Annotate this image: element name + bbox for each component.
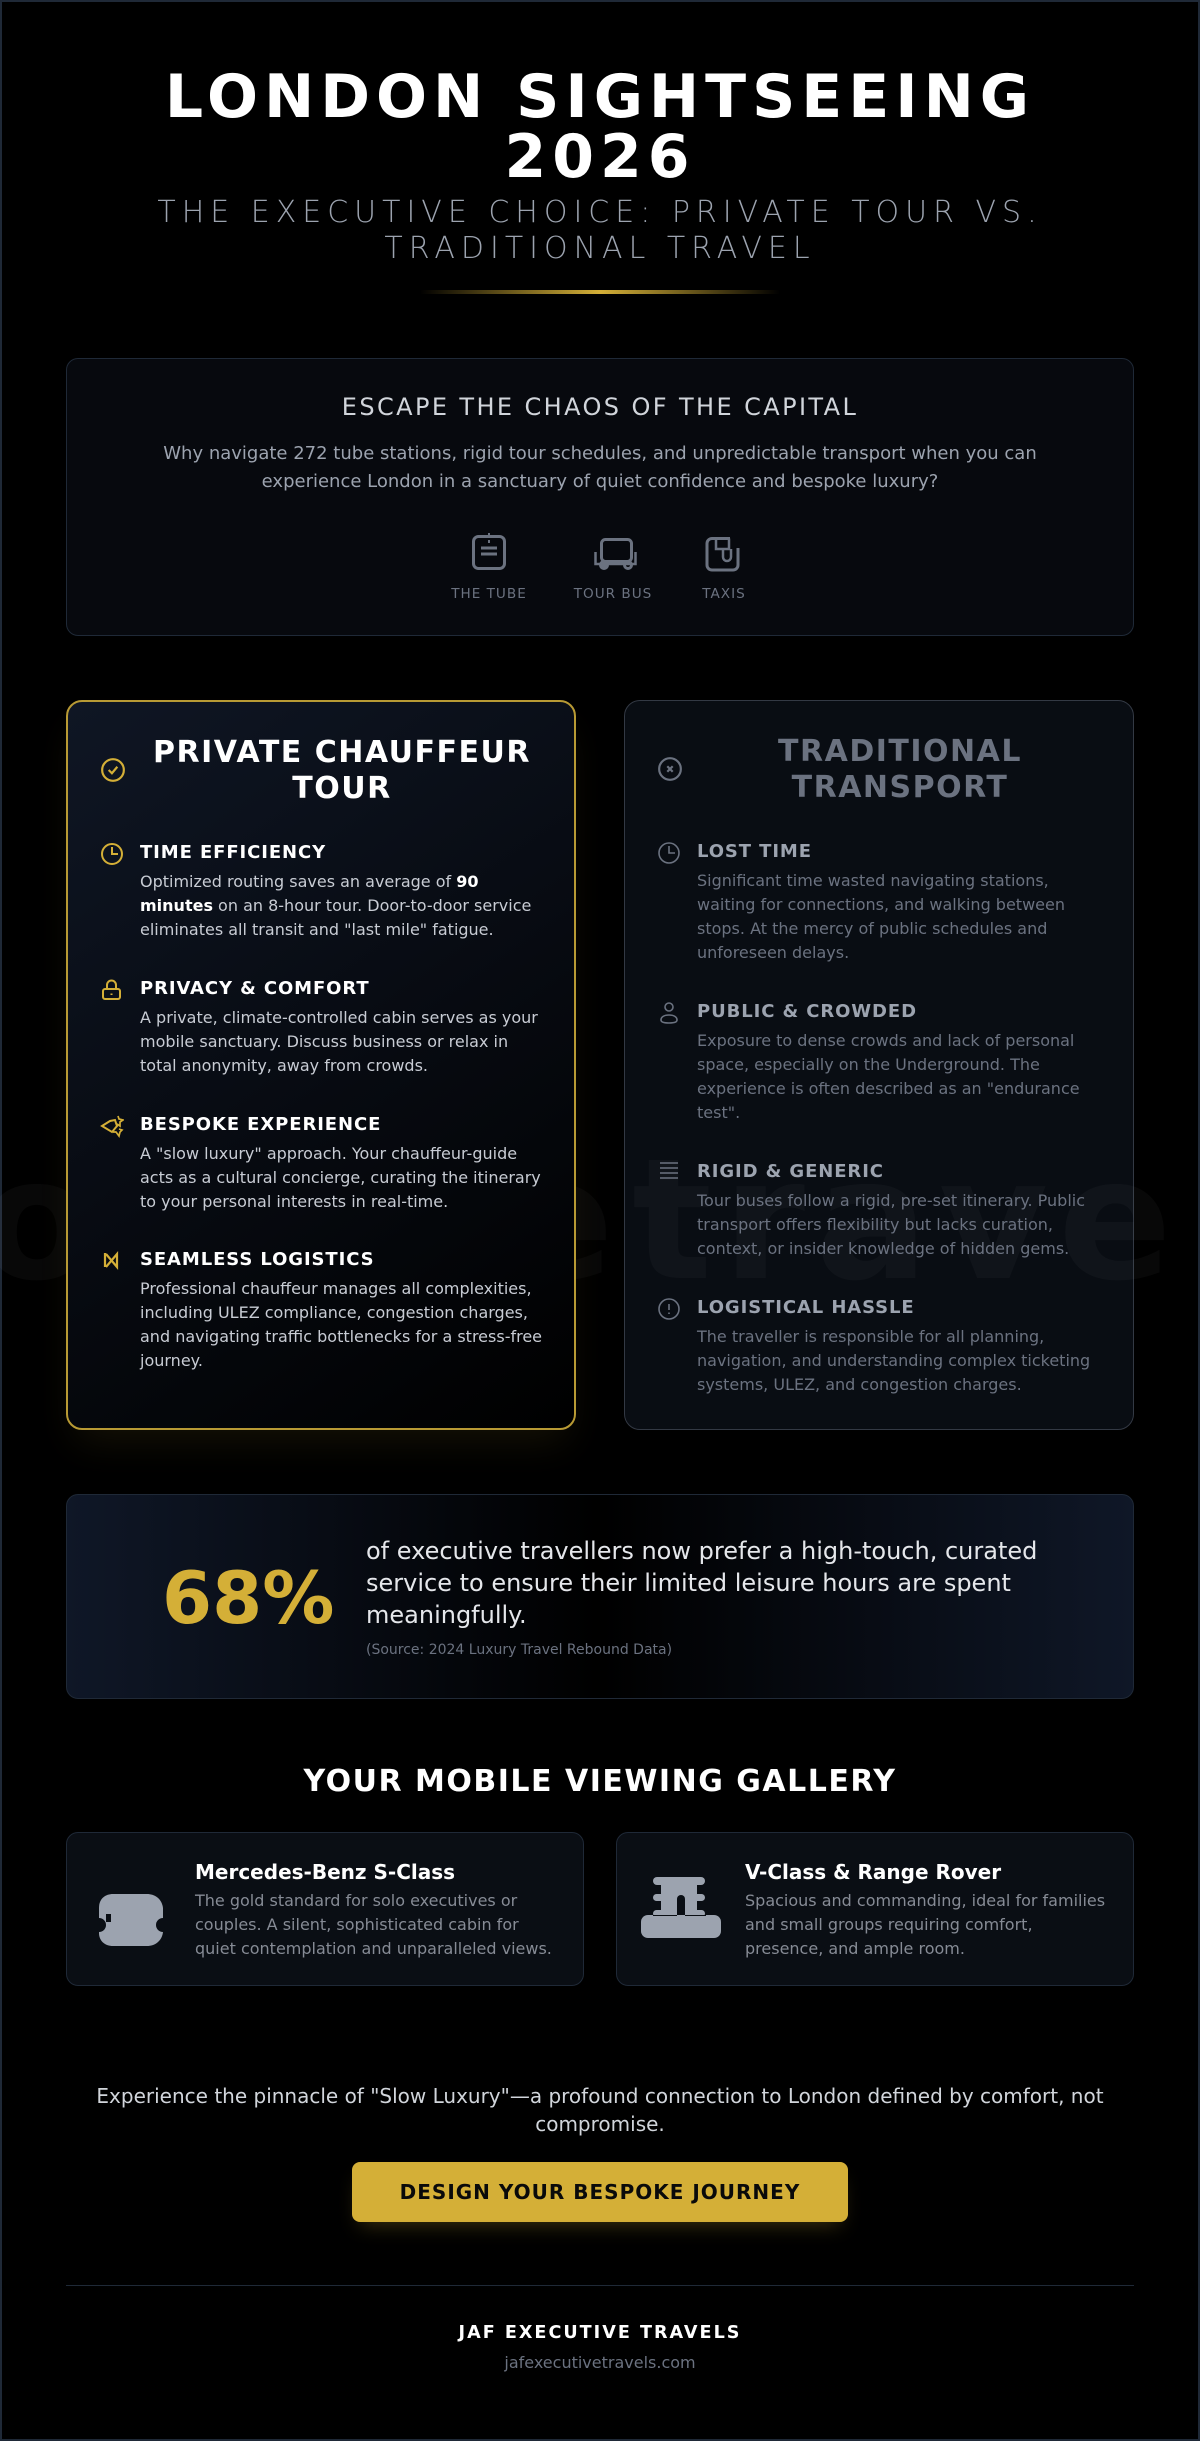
icon: lines: [660, 1162, 678, 1179]
button: DESIGN YOUR BESPOKE JOURNEY: [400, 2180, 800, 2204]
button: [352, 2162, 848, 2222]
item: bespoke experience: BESPOKE EXPERIENCE: [140, 1114, 381, 1135]
panel: v-class: [616, 1832, 1134, 1986]
icon: exclamation circle: [658, 1298, 680, 1320]
item: lost time: stops. At the mercy of public schedules and: [697, 919, 1047, 938]
icon: tube: [472, 533, 506, 570]
vehicle text: [745, 1891, 1105, 1958]
item: rigid and generic: [660, 1161, 1085, 1258]
stat number: 68%: [162, 1556, 334, 1640]
item: privacy and comfort: mobile sanctuary. Discuss business or relax in: [140, 1032, 508, 1051]
icon: bowtie: [104, 1251, 118, 1270]
vehicle text: Spacious and commanding, ideal for families: [745, 1891, 1105, 1910]
icon: person: [660, 1002, 678, 1024]
icon: lock: [102, 980, 121, 1000]
stat text: [366, 1537, 1037, 1629]
heading: traditional transport: TRANSPORT: [792, 770, 1008, 805]
watermark: [0, 1130, 1200, 1320]
item: logistical hassle: systems, ULEZ, and congestion charges.: [697, 1375, 1022, 1394]
item: privacy and comfort: A private, climate-controlled cabin serves as your: [140, 1008, 538, 1027]
subtitle: THE EXECUTIVE CHOICE: PRIVATE TOUR VS.: [157, 195, 1043, 230]
heading: traditional transport: [778, 734, 1022, 805]
vehicle title: V-Class & Range Rover: [745, 1860, 1001, 1884]
item: seamless logistics: Professional chauffeur manages all complexities,: [140, 1279, 532, 1298]
item: public and crowded: PUBLIC & CROWDED: [697, 1001, 917, 1022]
item: rigid and generic: context, or insider knowledge of hidden gems.: [697, 1239, 1069, 1258]
header gold divider: [420, 290, 780, 294]
item: lost time: waiting for connections, and walking between: [697, 895, 1065, 914]
panel: intro: [66, 358, 1134, 636]
item: privacy and comfort: total anonymity, away from crowds.: [140, 1056, 428, 1075]
icon: clock: [101, 843, 123, 865]
item: privacy and comfort: PRIVACY & COMFORT: [140, 978, 370, 999]
icon: tour bus: [594, 538, 637, 570]
item: logistical hassle: The traveller is responsible for all planning,: [697, 1327, 1044, 1346]
item: rigid and generic: RIGID & GENERIC: [697, 1161, 884, 1182]
stat text: meaningfully.: [366, 1601, 527, 1629]
vehicle text: presence, and ample room.: [745, 1939, 965, 1958]
item: seamless logistics: including ULEZ compliance, congestion charges,: [140, 1303, 528, 1322]
label: the tube: THE TUBE: [451, 586, 527, 602]
item: time efficiency: [101, 842, 531, 939]
item: seamless logistics: [104, 1249, 542, 1370]
subtitle: [157, 195, 1043, 266]
item: seamless logistics: journey.: [140, 1351, 203, 1370]
vehicle text: The gold standard for solo executives or: [195, 1891, 517, 1910]
label: taxis: TAXIS: [702, 586, 746, 602]
icon: van: [641, 1877, 721, 1938]
call to action text: Experience the pinnacle of "Slow Luxury"—a profound connection to London defined by comfort, not: [96, 2084, 1104, 2108]
intro heading: ESCAPE THE CHAOS OF THE CAPITAL: [342, 393, 858, 421]
intro text: experience London in a sanctuary of quiet confidence and bespoke luxury?: [262, 471, 938, 492]
item: logistical hassle: navigation, and understanding complex ticketing: [697, 1351, 1090, 1370]
icon: sedan: [99, 1894, 163, 1946]
heading: private chauffeur tour: [153, 735, 531, 806]
vehicle title: Mercedes-Benz S-Class: [195, 1860, 455, 1884]
gallery heading: YOUR MOBILE VIEWING GALLERY: [303, 1764, 897, 1799]
footer url: jafexecutivetravels.com: [504, 2353, 696, 2372]
vehicle text: quiet contemplation and unparalleled views.: [195, 1939, 552, 1958]
item: lost time: unforeseen delays.: [697, 943, 849, 962]
panel: private chauffeur tour: [66, 700, 576, 1430]
icon: taxi: [706, 537, 740, 572]
label: tour bus: TOUR BUS: [574, 586, 652, 602]
stat source: (Source: 2024 Luxury Travel Rebound Data): [366, 1642, 672, 1658]
item: seamless logistics: and navigating traffic bottlenecks for a stress-free: [140, 1327, 542, 1346]
item: public and crowded: test".: [697, 1103, 740, 1122]
intro text: [163, 443, 1037, 492]
heading: traditional transport: TRADITIONAL: [778, 734, 1022, 769]
stat text: of executive travellers now prefer a high-touch, curated: [366, 1537, 1037, 1565]
icon: check circle: [101, 758, 125, 782]
item: lost time: [658, 841, 1065, 962]
item: privacy and comfort: [102, 978, 538, 1075]
item: lost time: Significant time wasted navigating stations,: [697, 871, 1049, 890]
panel: traditional transport background: [624, 700, 1134, 1430]
item: time efficiency: Optimized routing saves an average of 90: [140, 872, 479, 891]
item: time efficiency: minutes on an 8-hour tour. Door-to-door service: [140, 896, 531, 915]
intro text: Why navigate 272 tube stations, rigid tour schedules, and unpredictable transport when you can: [163, 443, 1037, 464]
item: bespoke experience: [100, 1114, 541, 1211]
item: logistical hassle: LOGISTICAL HASSLE: [697, 1297, 915, 1318]
item: public and crowded: Exposure to dense crowds and lack of personal: [697, 1031, 1074, 1050]
subtitle: TRADITIONAL TRAVEL: [384, 231, 816, 266]
title: LONDON SIGHTSEEING: [165, 62, 1035, 132]
vehicle text: couples. A silent, sophisticated cabin for: [195, 1915, 519, 1934]
item: lost time: LOST TIME: [697, 841, 812, 862]
heading: private chauffeur tour: TOUR: [292, 771, 392, 806]
vehicle text: [194, 1891, 552, 1958]
icon: clock: [658, 842, 680, 864]
title: [165, 62, 1035, 192]
item: rigid and generic: Tour buses follow a rigid, pre-set itinerary. Public: [697, 1191, 1085, 1210]
item: rigid and generic: transport offers flexibility but lacks curation,: [697, 1215, 1053, 1234]
footer divider: [66, 2285, 1134, 2286]
item: time efficiency: TIME EFFICIENCY: [140, 842, 326, 863]
icon: sparkle star: [100, 1116, 124, 1138]
icon: cross circle: [658, 757, 682, 781]
title: 2026: [504, 122, 696, 192]
item: public and crowded: [660, 1001, 1080, 1122]
item: bespoke experience: to your personal interests in real-time.: [140, 1192, 448, 1211]
panel: s-class: [66, 1832, 584, 1986]
item: bespoke experience: A "slow luxury" approach. Your chauffeur-guide: [140, 1144, 517, 1163]
vehicle text: and small groups requiring comfort,: [745, 1915, 1033, 1934]
footer brand: JAF EXECUTIVE TRAVELS: [459, 2323, 741, 2343]
item: public and crowded: experience is often described as an "endurance: [697, 1079, 1080, 1098]
stat text: service to ensure their limited leisure hours are spent: [366, 1569, 1011, 1597]
panel: statistic: [66, 1494, 1134, 1699]
heading: private chauffeur tour: PRIVATE CHAUFFEUR: [153, 735, 531, 770]
call to action text: compromise.: [535, 2112, 665, 2136]
item: bespoke experience: acts as a cultural concierge, curating the itinerary: [140, 1168, 541, 1187]
item: logistical hassle: [658, 1297, 1090, 1394]
item: seamless logistics: SEAMLESS LOGISTICS: [140, 1249, 375, 1270]
item: public and crowded: space, especially on the Underground. The: [697, 1055, 1040, 1074]
item: time efficiency: eliminates all transit and "last mile" fatigue.: [140, 920, 494, 939]
call to action text: [96, 2084, 1104, 2136]
